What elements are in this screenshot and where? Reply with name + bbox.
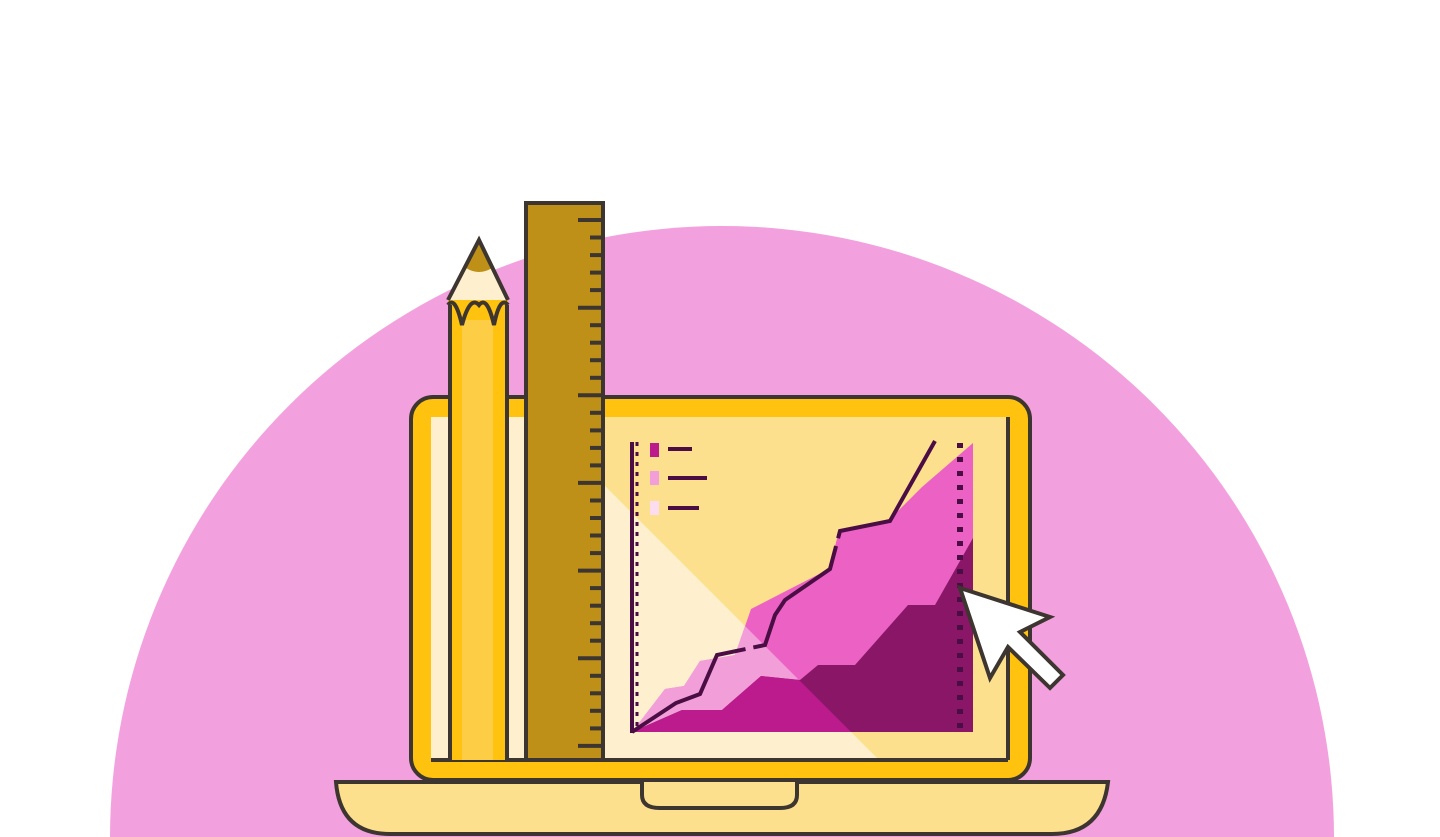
ruler <box>526 203 603 760</box>
trend line <box>632 441 935 732</box>
legend <box>650 443 707 515</box>
background circle <box>110 226 1334 837</box>
laptop <box>336 397 1108 834</box>
icon: cursor arrow <box>960 588 1063 688</box>
area chart <box>632 441 973 733</box>
illustration: laptop with chart, pencil and ruler <box>110 201 1334 837</box>
laptop frame <box>411 397 1030 780</box>
screen <box>431 417 1008 760</box>
axes <box>630 442 634 733</box>
laptop base <box>336 782 1108 834</box>
pencil <box>448 240 508 760</box>
trackpad notch <box>642 782 797 808</box>
